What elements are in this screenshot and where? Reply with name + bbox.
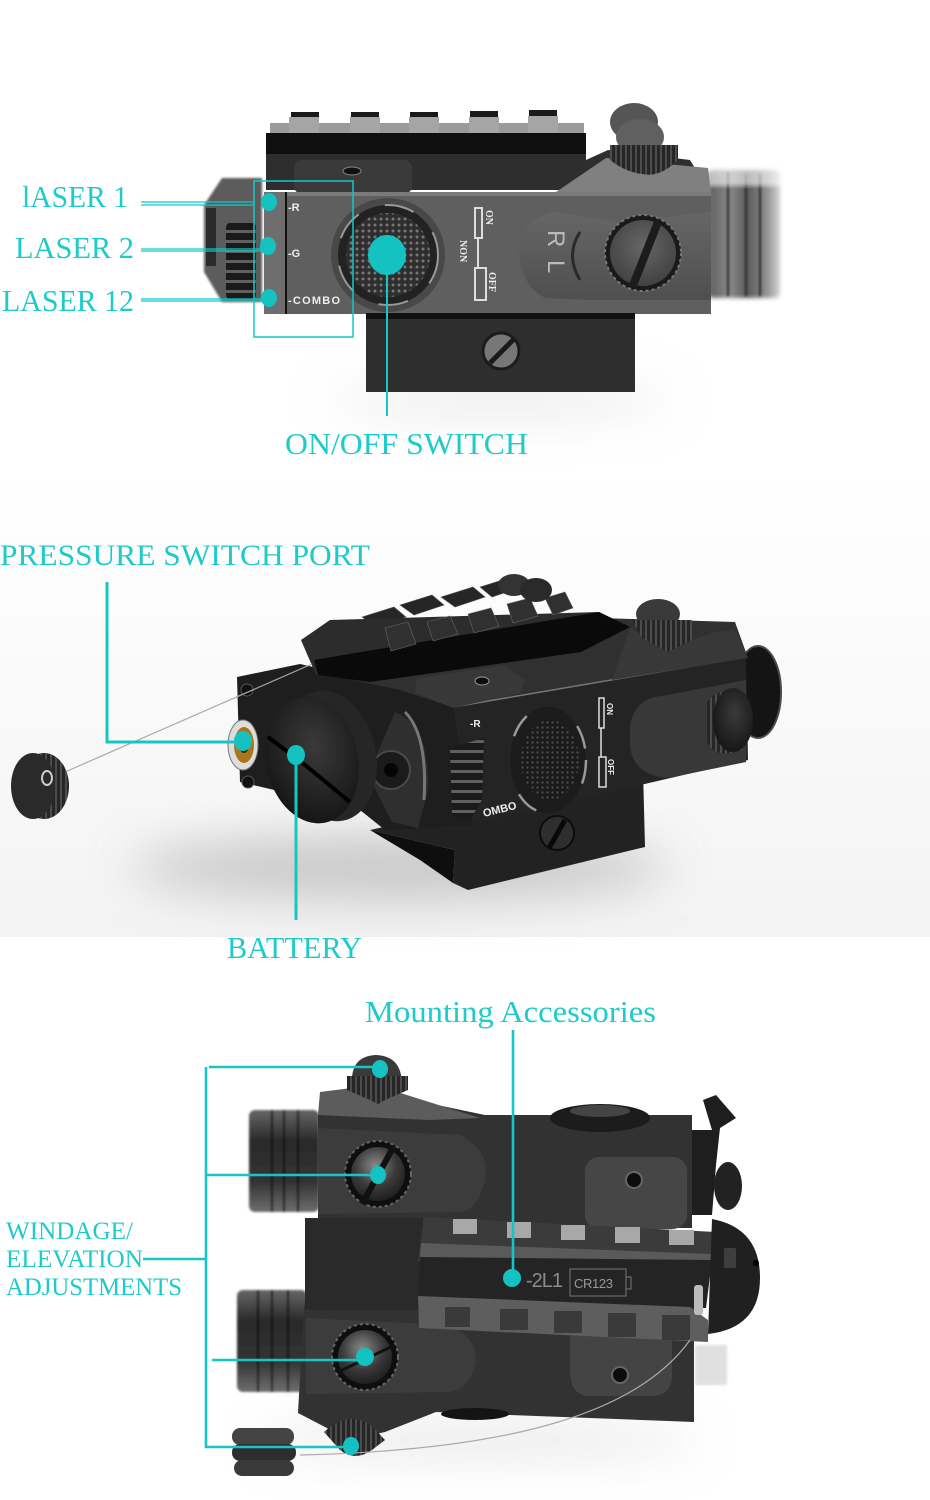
callout: mounting accessories bbox=[503, 1030, 521, 1287]
floor shadow bbox=[130, 836, 670, 900]
label: windage / elevation adjustments: ADJUSTMENTS bbox=[6, 1274, 182, 1301]
lower knob bbox=[332, 1324, 398, 1390]
rail body bbox=[301, 612, 630, 682]
marker: upper elevation bbox=[372, 1060, 388, 1078]
pressure port cap bbox=[11, 753, 69, 819]
focus wheel bbox=[450, 738, 484, 820]
port bbox=[228, 720, 258, 770]
screw stud bbox=[694, 1285, 703, 1315]
top dial bbox=[550, 1104, 650, 1132]
mount block bbox=[370, 770, 645, 890]
windage plate bbox=[519, 212, 711, 300]
back teeth row bbox=[362, 577, 522, 627]
callout: pressure switch port bbox=[107, 582, 252, 751]
label: on/off switch: ON/OFF SWITCH bbox=[285, 426, 528, 461]
body bbox=[264, 192, 711, 314]
front teeth row bbox=[385, 592, 573, 651]
lower wing plate bbox=[306, 1318, 476, 1394]
rear sight bbox=[692, 1095, 742, 1215]
side labels: -COMBO bbox=[288, 295, 340, 307]
lower body bbox=[298, 1305, 694, 1440]
rail: centre panel bbox=[418, 1257, 712, 1308]
lower rear stud bbox=[695, 1345, 727, 1385]
panel: top view, two units bbox=[6, 994, 760, 1476]
callout: battery bbox=[287, 745, 305, 920]
marker: laser 1 bbox=[261, 193, 277, 211]
on/off button bbox=[510, 707, 586, 813]
marker: laser 12 bbox=[261, 289, 277, 307]
mini rail bbox=[301, 577, 630, 682]
top knob bbox=[610, 103, 678, 175]
left end wheel bbox=[204, 178, 262, 302]
label: windage / elevation adjustments: ELEVATION bbox=[6, 1246, 143, 1273]
top dome bbox=[498, 574, 552, 602]
shoulder bbox=[612, 628, 748, 680]
switch markings: OFF bbox=[486, 272, 497, 292]
marker: lower elevation bbox=[343, 1437, 359, 1455]
hinge bbox=[368, 712, 428, 828]
label: battery: BATTERY bbox=[227, 930, 362, 965]
lower lens bbox=[237, 1290, 307, 1392]
lens barrel bbox=[708, 164, 784, 298]
model marking bbox=[526, 1269, 631, 1296]
label: mounting accessories: Mounting Accessories bbox=[365, 994, 656, 1029]
callout lines: lasers bbox=[141, 181, 353, 337]
top surface bbox=[314, 618, 748, 707]
soft backdrop bbox=[0, 470, 930, 937]
switch markings: ON bbox=[605, 703, 614, 715]
top knob bbox=[347, 1055, 408, 1104]
upper lens bbox=[249, 1110, 319, 1212]
upper knob bbox=[345, 1141, 411, 1207]
rail teeth bbox=[270, 110, 584, 133]
lens rear bbox=[735, 646, 781, 738]
rail base bbox=[266, 133, 708, 190]
elevation knob bbox=[632, 599, 692, 652]
underside knob bbox=[441, 1408, 509, 1420]
lower pad bbox=[570, 1330, 672, 1396]
mount shadow bbox=[330, 386, 670, 414]
device: side view bbox=[204, 103, 784, 414]
wire bbox=[65, 664, 312, 772]
adjustment knob bbox=[605, 215, 681, 291]
device: top view bbox=[232, 1055, 760, 1476]
side labels: -R bbox=[288, 202, 300, 214]
marker: lower windage bbox=[356, 1348, 374, 1366]
side labels: -G bbox=[288, 248, 300, 260]
switch markings bbox=[599, 698, 615, 787]
middle block bbox=[305, 1218, 423, 1310]
rail wedge wall bbox=[314, 612, 630, 682]
side labels: OMBO bbox=[482, 800, 518, 820]
rail: top teeth bbox=[418, 1217, 716, 1262]
bottom knob bbox=[324, 1419, 385, 1456]
panel: rear three-quarter view bbox=[0, 470, 930, 965]
marker: laser 2 bbox=[260, 237, 276, 255]
on/off button bbox=[331, 198, 445, 312]
plate bbox=[415, 665, 525, 708]
label: laser 12: LASER 12 bbox=[2, 283, 134, 318]
panel: front side view bbox=[2, 103, 784, 461]
mount block bbox=[366, 313, 635, 392]
port cap bbox=[232, 1428, 296, 1476]
shoulder bbox=[556, 158, 711, 194]
label: windage / elevation adjustments: WINDAGE/ bbox=[6, 1218, 133, 1245]
upper wing plate bbox=[318, 1128, 486, 1214]
end cap bbox=[708, 1219, 760, 1334]
label: laser 2: LASER 2 bbox=[15, 230, 134, 265]
side knob bbox=[707, 688, 753, 754]
rear block bbox=[237, 664, 475, 830]
rail: wall band bbox=[420, 1243, 712, 1262]
marker: upper windage bbox=[370, 1166, 386, 1184]
windage plate: L bbox=[542, 260, 569, 273]
switch markings: OFF bbox=[606, 759, 615, 775]
wire bbox=[300, 1340, 690, 1455]
windage plate bbox=[630, 680, 746, 778]
upper pad bbox=[585, 1157, 687, 1229]
ground shadow bbox=[260, 1426, 700, 1454]
side labels bbox=[288, 202, 340, 307]
top plate bbox=[294, 160, 412, 194]
body front face bbox=[453, 657, 748, 824]
switch markings bbox=[457, 208, 497, 300]
battery cap bbox=[254, 682, 389, 832]
marker: on/off switch bbox=[368, 235, 406, 416]
side labels bbox=[470, 719, 518, 820]
label: laser 1: lASER 1 bbox=[22, 179, 128, 214]
device: three-quarter bbox=[11, 574, 781, 890]
switch markings: ON bbox=[483, 210, 494, 226]
upper body bbox=[318, 1092, 692, 1228]
rail: bottom teeth bbox=[418, 1296, 708, 1342]
switch markings: NON bbox=[457, 240, 468, 263]
model marking: CR123 bbox=[574, 1276, 613, 1291]
label: windage / elevation adjustments bbox=[6, 1218, 182, 1301]
side labels: -R bbox=[470, 719, 481, 730]
windage plate: R bbox=[542, 230, 569, 247]
bracket and callout lines: adjustments bbox=[143, 1067, 378, 1447]
model marking: -2L1 bbox=[526, 1270, 563, 1292]
label: pressure switch port: PRESSURE SWITCH PORT bbox=[0, 539, 370, 572]
